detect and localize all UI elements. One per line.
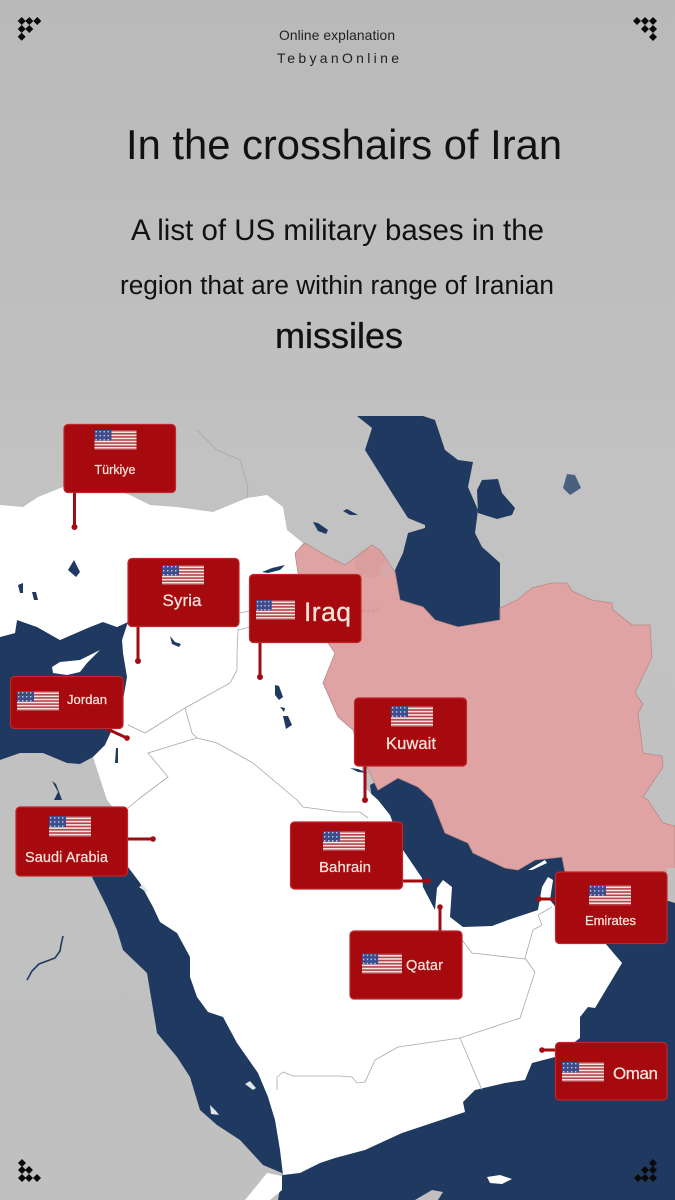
lake: Kara-Bogaz <box>477 479 515 519</box>
header: source: Online explanation <box>279 28 395 43</box>
callout: Saudi Arabia <box>16 807 156 876</box>
header: source <box>277 28 399 66</box>
callout: Qatar: Qatar <box>406 958 443 974</box>
lake: Aral remnant <box>563 474 581 495</box>
callout: Syria: Syria <box>162 591 202 610</box>
subtitle: missiles <box>275 315 403 356</box>
land: Oman gulf north coast <box>667 868 675 903</box>
sea: Red Sea <box>92 860 300 1185</box>
callout: Iraq <box>250 574 361 680</box>
watermark <box>349 548 394 616</box>
island: Abd al Kuri <box>415 1190 443 1200</box>
callout: Saudi Arabia: Saudi Arabia <box>25 850 109 866</box>
subtitle: A list of US military bases in the <box>131 214 544 247</box>
callout: Jordan: Jordan <box>67 692 107 707</box>
callout: Bahrain: Bahrain <box>319 859 371 876</box>
callout: Syria <box>128 558 239 664</box>
callout: Emirates: Emirates <box>585 913 636 928</box>
callout: Kuwait: Kuwait <box>386 735 436 753</box>
sea: Persian Gulf and Arabian Sea <box>278 770 675 1200</box>
sea: Mediterranean <box>0 620 140 764</box>
callout: Bahrain <box>290 822 431 889</box>
callout: Emirates <box>536 872 667 944</box>
callout: Oman: Oman <box>613 1064 658 1083</box>
callout: Iraq: Iraq <box>304 597 351 627</box>
lakes <box>18 509 368 980</box>
callout: Kuwait <box>354 698 466 803</box>
callout: Jordan <box>10 676 130 741</box>
callout: Türkiye <box>64 424 176 530</box>
land: Iran <box>295 543 675 872</box>
callout: Oman <box>539 1042 667 1100</box>
callout: Qatar <box>350 904 462 999</box>
map <box>0 416 675 1200</box>
island: Qeshm <box>528 860 547 870</box>
header: source: TebyanOnline <box>277 50 399 66</box>
callout: Türkiye: Türkiye <box>94 463 136 477</box>
title: In the crosshairs of Iran <box>126 121 562 168</box>
island: Red Sea islets <box>139 885 256 1115</box>
island: Cyprus <box>52 650 100 675</box>
sea: Caspian <box>357 416 502 627</box>
subtitle: region that are within range of Iranian <box>120 270 554 300</box>
subtitle <box>120 214 554 356</box>
watermark: تبیین <box>349 599 381 616</box>
land: white region <box>0 480 622 1175</box>
country borders <box>128 430 552 1090</box>
island: Socotra <box>487 1175 512 1184</box>
land: Horn of Africa <box>245 1173 282 1200</box>
